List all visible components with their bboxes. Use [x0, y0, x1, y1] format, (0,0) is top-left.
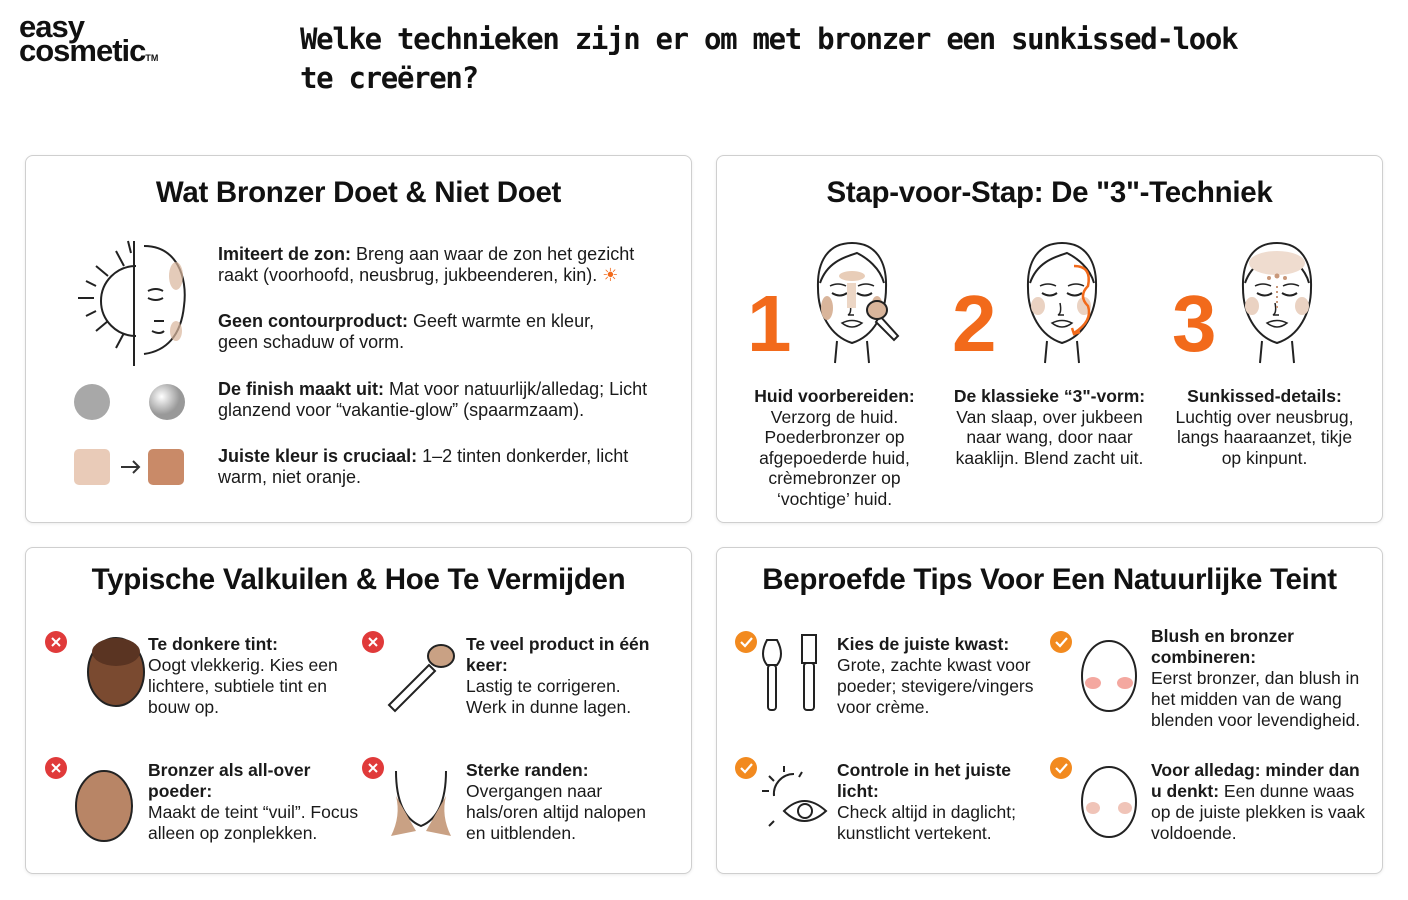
- logo: easy: [19, 9, 84, 44]
- step 3: Luchtig over neusbrug, langs haaraanzet, tikje op kinpunt.: [1175, 406, 1354, 468]
- step 3: [1172, 242, 1354, 468]
- title: te creëren?: [300, 61, 478, 95]
- item: sterke randen: Sterke randen:: [466, 760, 589, 780]
- tip: kwast: Kies de juiste kwast:: [837, 634, 1009, 654]
- panel: wat bronzer doet: [25, 155, 692, 523]
- heading: Stap-voor-Stap: De "3"-Techniek: [827, 176, 1272, 209]
- panel: stap voor stap: [716, 155, 1383, 523]
- tip: licht: Controle in het juiste licht:: [837, 760, 1011, 801]
- step 1: 1: [747, 279, 792, 368]
- step 1: [747, 242, 915, 508]
- item: te veel product: [362, 631, 649, 717]
- step 1: Huid voorbereiden:: [754, 386, 915, 406]
- step 3: Sunkissed-details:: [1187, 386, 1342, 406]
- icon: colour swatches: [74, 449, 184, 485]
- item: all-over: [45, 757, 358, 843]
- step 2: 2: [952, 279, 996, 368]
- tip: minder: [1050, 757, 1365, 843]
- step 2: [952, 242, 1145, 468]
- item: te donkere tint: Te donkere tint:: [148, 634, 278, 654]
- item: all-over: Maakt de teint “vuil”. Focus alleen op zonplekken.: [148, 802, 358, 843]
- tip: licht: Check altijd in daglicht; kunstlicht vertekent.: [837, 802, 1016, 843]
- heading: Typische Valkuilen & Hoe Te Vermijden: [92, 563, 625, 596]
- tip: blush: Blush en bronzer combineren:: [1151, 626, 1294, 667]
- panel: valkuilen: [25, 547, 692, 874]
- text: juiste kleur: Juiste kleur is cruciaal: 1–2 tinten donkerder, licht warm, niet oranje.: [218, 446, 628, 487]
- title: [300, 22, 1238, 95]
- item: sterke randen: [362, 757, 646, 843]
- item: sterke randen: Overgangen naar hals/oren altijd nalopen en uitblenden.: [466, 781, 646, 843]
- logo: [19, 9, 158, 68]
- tip: licht: [735, 757, 1016, 843]
- panel: tips: [716, 547, 1383, 874]
- heading: Beproefde Tips Voor Een Natuurlijke Teint: [762, 563, 1337, 596]
- step 1: Verzorg de huid. Poederbronzer op afgepoederde huid, crèmebronzer op ‘vochtige’ huid.: [759, 406, 910, 508]
- logo: cosmeticTM: [19, 33, 158, 68]
- item: all-over: Bronzer als all-over poeder:: [148, 760, 310, 801]
- text: imiteert de zon: Imiteert de zon: Breng aan waar de zon het gezicht raakt (voorhoofd, neusbrug, jukbeenderen, kin). ☀: [218, 244, 634, 285]
- heading: Wat Bronzer Doet & Niet Doet: [156, 176, 561, 209]
- step 3: 3: [1172, 279, 1216, 368]
- item: te veel product: Lastig te corrigeren. Werk in dunne lagen.: [466, 676, 631, 717]
- tip: kwast: Grote, zachte kwast voor poeder; stevigere/vingers voor crème.: [837, 655, 1034, 717]
- item: te donkere tint: Oogt vlekkerig. Kies een lichtere, subtiele tint en bouw op.: [148, 655, 338, 717]
- title: Welke technieken zijn er om met bronzer een sunkissed-look: [300, 22, 1237, 56]
- tip: blush: [1050, 626, 1360, 730]
- text: geen contourproduct: Geen contourproduct: Geeft warmte en kleur, geen schaduw of vorm.: [218, 311, 594, 352]
- icon: sun face: [78, 240, 186, 366]
- tip: minder: Voor alledag: minder dan u denkt: Een dunne waas op de juiste plekken is vaak voldoende.: [1151, 760, 1365, 843]
- step 2: De klassieke “3"-vorm:: [954, 386, 1145, 406]
- step 2: Van slaap, over jukbeen naar wang, door naar kaaklijn. Blend zacht uit.: [956, 406, 1143, 468]
- tip: blush: Eerst bronzer, dan blush in het midden van de wang blenden voor levendigheid.: [1151, 668, 1360, 730]
- icon: finish circles: [74, 384, 185, 420]
- text: finish: De finish maakt uit: Mat voor natuurlijk/alledag; Licht glanzend voor “vakantie-glow” (spaarmzaam).: [218, 379, 647, 420]
- item: te donkere tint: [45, 631, 338, 717]
- tip: kwast: [735, 631, 1034, 717]
- item: te veel product: Te veel product in één keer:: [466, 634, 649, 675]
